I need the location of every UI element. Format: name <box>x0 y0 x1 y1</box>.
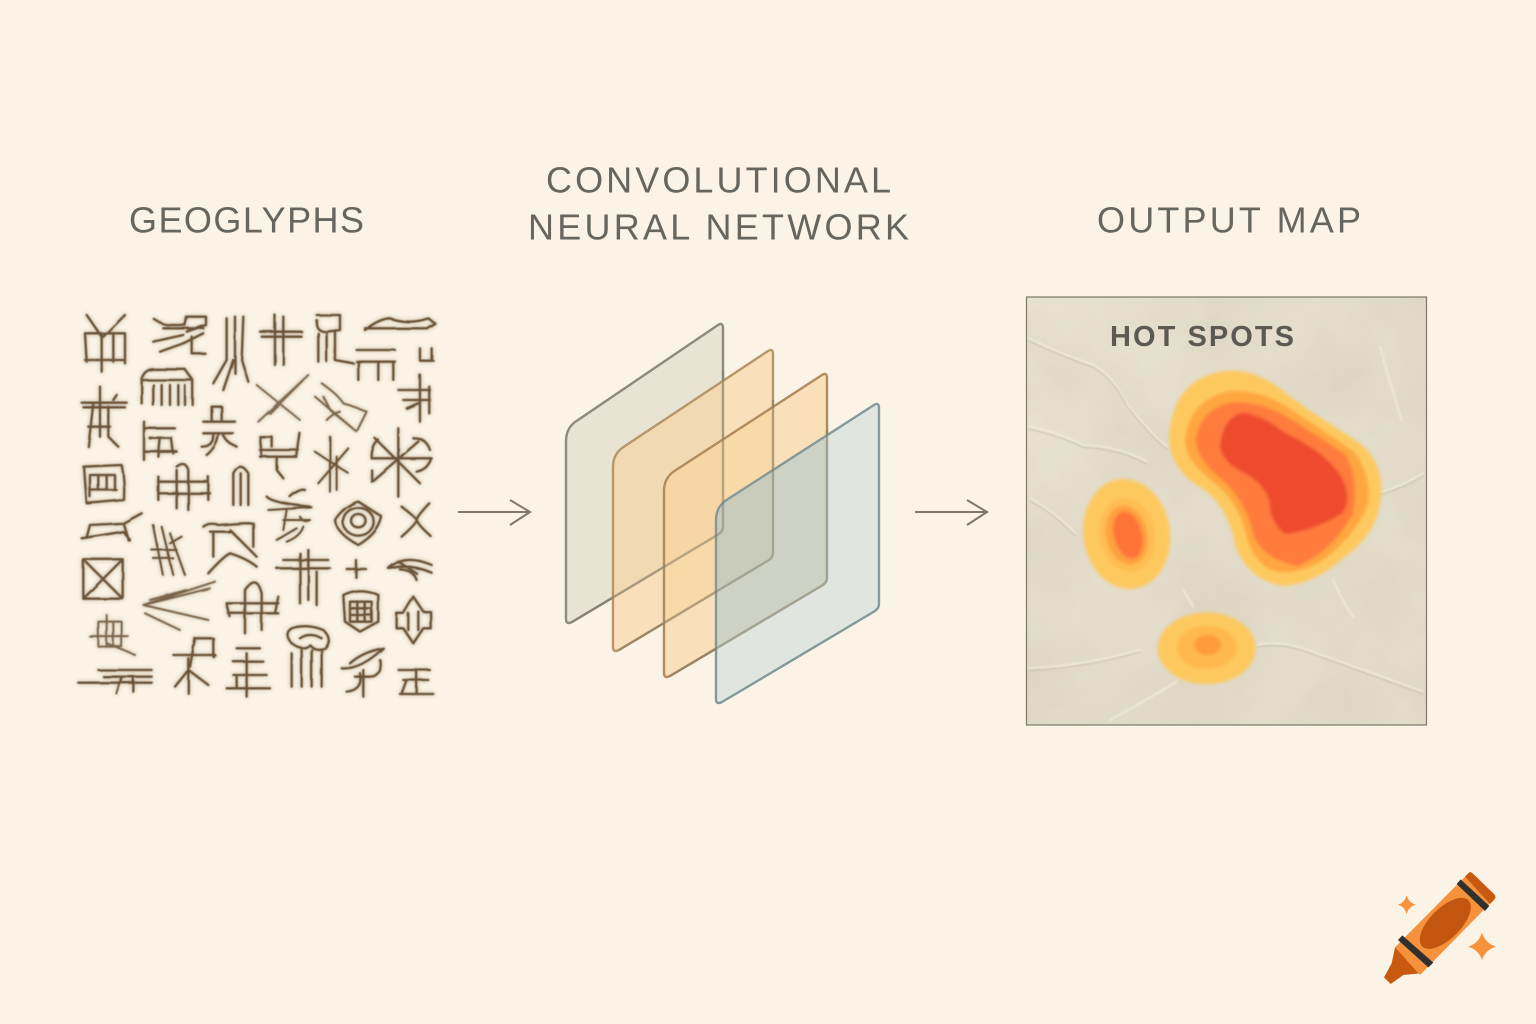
hot spot: left <box>1081 476 1172 592</box>
panel: stacked network layers <box>566 324 879 703</box>
crayon body <box>1395 872 1496 975</box>
sparkle: large <box>1468 933 1496 960</box>
hot spot: large <box>1170 372 1380 585</box>
heat blobs <box>1076 372 1380 684</box>
arrow: geoglyphs to network <box>458 500 530 525</box>
sparkle: small <box>1398 895 1416 914</box>
layer 4: blue-grey <box>716 404 879 703</box>
layer 2: orange <box>613 350 773 651</box>
overlap shading seen through the front layer <box>717 438 826 646</box>
heading: convolutional neural network: CONVOLUTIONAL <box>546 160 891 200</box>
icon: crayon with sparkles <box>1384 872 1496 984</box>
layer 1: grey <box>566 324 723 623</box>
heading: convolutional neural network <box>528 160 909 248</box>
heading: output map: OUTPUT MAP <box>1097 200 1361 240</box>
crayon tip <box>1384 947 1423 984</box>
hot spot: bottom <box>1158 612 1256 684</box>
crayon bands <box>1398 879 1489 967</box>
layer 3: orange <box>664 374 827 677</box>
heading: geoglyphs: GEOGLYPHS <box>129 200 364 240</box>
arrow: network to output map <box>915 500 987 525</box>
heading: convolutional neural network: NEURAL NETWORK <box>528 206 909 248</box>
glyph rows: lower half <box>78 502 433 697</box>
crayon end cap <box>1465 872 1495 904</box>
glyph rows: upper half <box>82 315 435 510</box>
panel: geoglyph symbols grid <box>78 315 435 697</box>
panel: output map <box>1026 297 1426 725</box>
label: hot spots: HOT SPOTS <box>1110 321 1294 353</box>
map border <box>1026 297 1426 725</box>
crayon label oval <box>1411 889 1479 957</box>
layer edges showing through <box>572 370 827 676</box>
map terrain <box>1026 297 1426 725</box>
